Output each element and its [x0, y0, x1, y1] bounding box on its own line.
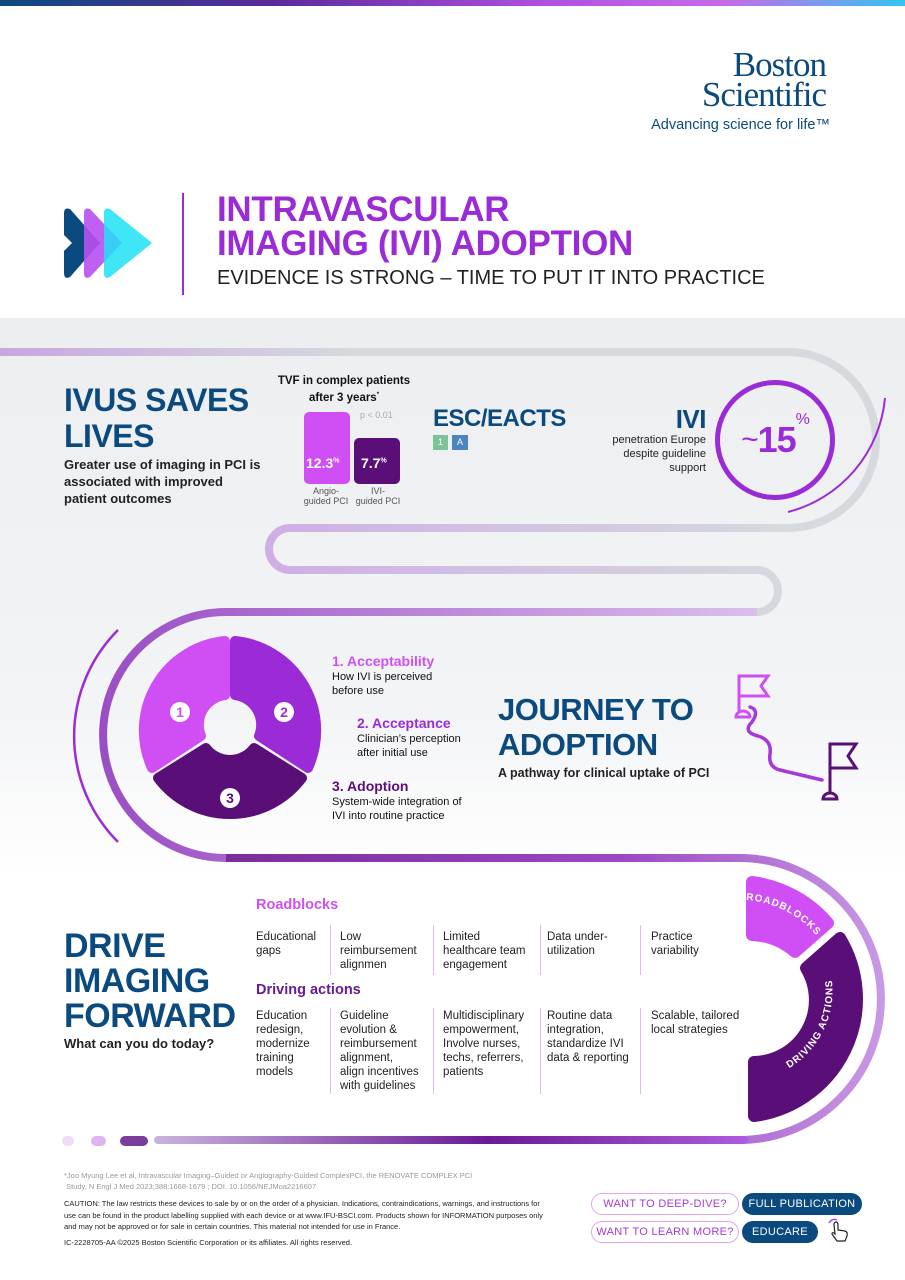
- bar chart: TVF: p < 0.01: [360, 410, 393, 420]
- roadblocks table: alignmen: [340, 959, 387, 971]
- driving actions table: data & reporting: [547, 1052, 629, 1064]
- bar chart: TVF: 7.7%: [361, 455, 387, 471]
- bar chart: TVF: TVF in complex patients: [278, 375, 410, 387]
- bar chart: TVF: guided PCI: [356, 496, 400, 506]
- roadblocks table: healthcare team: [443, 945, 525, 957]
- button: full publication: [742, 1193, 862, 1215]
- circle: ~15%: [715, 380, 835, 500]
- step 2: after initial use: [357, 747, 428, 759]
- title: INTRAVASCULAR: [217, 190, 509, 229]
- ring: roadblocks / driving actions: DRIVING ACTIONS: [786, 980, 832, 1068]
- IVI penetration text: penetration Europe despite guideline support: [612, 434, 706, 474]
- circle: ~15%: ~: [741, 423, 758, 456]
- button: want to deep-dive: WANT TO DEEP-DIVE?: [603, 1198, 727, 1210]
- ESC/EACTS guideline: ESC/EACTS: [433, 405, 566, 432]
- heading: IVUS SAVES LIVES: LIVES: [64, 418, 154, 454]
- driving actions table: reimbursement: [340, 1038, 417, 1050]
- roadblocks table: Low: [340, 931, 361, 943]
- logo: [651, 45, 830, 133]
- top gradient bar: [0, 0, 905, 6]
- logo: Boston: [733, 45, 826, 84]
- step 1: 1. Acceptability: [332, 653, 434, 669]
- caution text: CAUTION: The law restricts these devices to sale by or on the order of a physician. Indications, contraindications, warnings, and instructions for use can be found in the product labelling supplied with each device or at www.IFU-BSCI.com. Products shown for INFORMATION purposes only and may not be approved or for sale in certain countries. This material not intended for use in France.: [64, 1199, 543, 1231]
- driving actions table: training: [256, 1052, 294, 1064]
- heading: journey to adoption: JOURNEY TO: [498, 692, 693, 727]
- title: [217, 190, 765, 289]
- bar chart: TVF: [278, 375, 410, 506]
- roadblocks table: Limited: [443, 931, 480, 943]
- cycle diagram: [138, 636, 322, 819]
- bar chart: TVF: 12.3%: [306, 455, 339, 471]
- logo: Advancing science for life™: [651, 117, 830, 133]
- button: want to deep-dive: [591, 1193, 739, 1215]
- step 2: [357, 715, 461, 759]
- circle: ~15%: 15: [758, 419, 796, 460]
- driving actions table: integration,: [547, 1024, 604, 1036]
- button: educare: [742, 1221, 818, 1243]
- heading: journey to adoption: ADOPTION: [498, 727, 658, 762]
- driving actions table: standardize IVI: [547, 1038, 624, 1050]
- text: IVUS description: Greater use of imaging in PCI is associated with improved patient outcomes: [64, 457, 260, 506]
- roadblocks table: variability: [651, 945, 699, 957]
- icon: hand pointer: [828, 1218, 848, 1242]
- footnote: [64, 1171, 472, 1191]
- roadblocks table: gaps: [256, 945, 281, 957]
- cycle diagram: 1: [176, 704, 184, 720]
- heading: journey to adoption: [498, 692, 693, 762]
- heading: IVUS SAVES LIVES: IVUS SAVES: [64, 382, 249, 418]
- bar chart: TVF: IVI-: [371, 486, 385, 496]
- footnote: Study, N Engl J Med 2023;388:1668-1679 ; DOI: 10.1056/NEJMoa2216607: [66, 1182, 316, 1191]
- step 1: [332, 653, 434, 697]
- ring: roadblocks / driving actions: ROADBLOCKS: [746, 893, 820, 934]
- cycle diagram: 3: [226, 790, 234, 806]
- background band: [0, 318, 905, 878]
- step 3: [332, 778, 462, 822]
- IVI penetration text: [612, 404, 706, 474]
- step 1: before use: [332, 685, 384, 697]
- button: full publication: FULL PUBLICATION: [749, 1198, 855, 1210]
- driving actions table: techs, referrers,: [443, 1052, 524, 1064]
- title: IMAGING (IVI) ADOPTION: [217, 224, 633, 263]
- roadblocks table: engagement: [443, 959, 507, 971]
- bar chart: TVF: Angio-: [313, 486, 339, 496]
- driving actions table: empowerment,: [443, 1024, 519, 1036]
- roadblocks table: Roadblocks: [256, 897, 338, 913]
- roadblocks table: reimbursement: [340, 945, 417, 957]
- driving actions table: [256, 982, 739, 1094]
- driving actions table: align incentives: [340, 1066, 419, 1078]
- driving actions table: modernize: [256, 1038, 310, 1050]
- icon: arrows: [64, 208, 152, 278]
- bar chart: TVF: after 3 years*: [309, 392, 379, 404]
- driving actions table: local strategies: [651, 1024, 728, 1036]
- caution text: [64, 1199, 543, 1246]
- divider vertical: [182, 193, 184, 295]
- step 2: Clinician’s perception: [357, 733, 461, 745]
- roadblocks table: utilization: [547, 945, 595, 957]
- text: pathway: A pathway for clinical uptake of PCI: [498, 766, 709, 780]
- title: EVIDENCE IS STRONG – TIME TO PUT IT INTO PRACTICE: [217, 267, 765, 289]
- roadblocks table: Educational: [256, 931, 316, 943]
- driving actions table: Multidisciplinary: [443, 1010, 524, 1022]
- cycle diagram: 2: [280, 704, 288, 720]
- driving actions table: Involve nurses,: [443, 1038, 520, 1050]
- button: educare: EDUCARE: [752, 1226, 808, 1238]
- roadblocks table: Practice: [651, 931, 693, 943]
- driving actions table: Routine data: [547, 1010, 612, 1022]
- heading: IVUS SAVES LIVES: [64, 382, 249, 454]
- driving actions table: evolution &: [340, 1024, 397, 1036]
- button: want to learn more: WANT TO LEARN MORE?: [596, 1226, 734, 1238]
- ESC/EACTS guideline: A: [457, 437, 463, 447]
- icon: flags: [734, 674, 859, 800]
- logo: Scientific: [702, 75, 826, 114]
- text: what can you do today: What can you do today?: [64, 1036, 214, 1051]
- heading: drive imaging forward: IMAGING: [64, 962, 210, 1000]
- step 1: How IVI is perceived: [332, 671, 432, 683]
- IVI penetration text: IVI: [676, 404, 706, 434]
- step 3: 3. Adoption: [332, 778, 408, 794]
- driving actions table: patients: [443, 1066, 483, 1078]
- step 2: 2. Acceptance: [357, 715, 451, 731]
- heading: drive imaging forward: FORWARD: [64, 997, 236, 1035]
- roadblocks table: [256, 897, 699, 975]
- footnote: *Joo Myung Lee et al, Intravascular Imaging–Guided or Angiography-Guided ComplexPCI, the RENOVATE COMPLEX PCI: [64, 1171, 472, 1180]
- heading: drive imaging forward: [64, 927, 236, 1035]
- ring: roadblocks / driving actions: [746, 876, 863, 1122]
- driving actions table: with guidelines: [340, 1080, 415, 1092]
- roadblocks table: Data under-: [547, 931, 608, 943]
- caution text: IC-2228705-AA ©2025 Boston Scientific Corporation or its affiliates. All rights reserved.: [64, 1238, 352, 1246]
- driving actions table: Scalable, tailored: [651, 1010, 739, 1022]
- ESC/EACTS guideline: [433, 405, 566, 450]
- driving actions table: Guideline: [340, 1010, 389, 1022]
- driving actions table: redesign,: [256, 1024, 303, 1036]
- button: want to learn more: [591, 1221, 739, 1243]
- driving actions table: alignment,: [340, 1052, 393, 1064]
- heading: drive imaging forward: DRIVE: [64, 927, 165, 965]
- step 3: IVI into routine practice: [332, 810, 445, 822]
- driving actions table: models: [256, 1066, 293, 1078]
- circle: ~15%: %: [796, 411, 809, 428]
- step 3: System-wide integration of: [332, 796, 462, 808]
- driving actions table: Education: [256, 1010, 307, 1022]
- bar chart: TVF: guided PCI: [304, 496, 348, 506]
- ESC/EACTS guideline: 1: [438, 437, 443, 447]
- driving actions table: Driving actions: [256, 982, 361, 998]
